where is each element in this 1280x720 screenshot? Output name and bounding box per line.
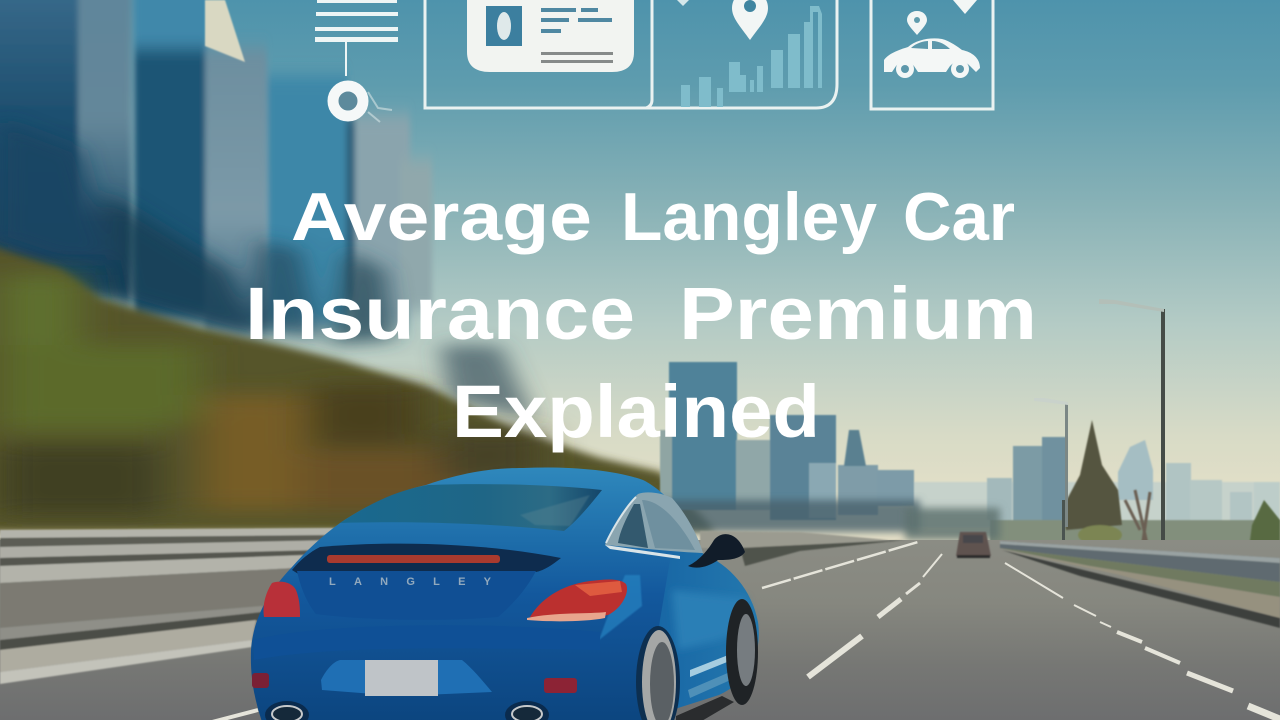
road surface	[0, 540, 1280, 720]
icon: list lines and pin	[315, 0, 398, 122]
title line 2: Premium	[679, 272, 1037, 355]
panel: driver card and chart frame	[425, 0, 837, 108]
door sill	[690, 650, 742, 677]
wing mirror	[688, 534, 745, 568]
title line 1: Car	[903, 179, 1015, 255]
title	[245, 179, 1037, 453]
rear window	[340, 484, 602, 531]
title line 1: Langley	[621, 179, 877, 255]
bar chart	[681, 6, 822, 107]
title line 1: Average	[291, 179, 592, 255]
car body	[251, 468, 688, 720]
title line 3: Explained	[452, 370, 820, 453]
distant city skyline	[660, 362, 1280, 557]
far wheel	[726, 599, 758, 705]
far road shoulder behind the rail	[700, 531, 890, 548]
blurred towers on the left	[0, 0, 535, 420]
icon: location pin	[907, 11, 927, 35]
small pin	[677, 0, 689, 6]
under-car shadow	[676, 696, 734, 720]
left tail light	[263, 582, 300, 617]
right guard rail	[1000, 541, 1280, 628]
left reflector	[252, 673, 269, 688]
roadside trees	[1064, 420, 1280, 557]
license plate recess	[321, 660, 492, 696]
brake light bar	[327, 555, 500, 563]
lane markings	[212, 542, 1280, 720]
right tail light	[530, 579, 627, 619]
right reflector	[544, 678, 577, 693]
title line 2: Insurance	[245, 272, 635, 355]
left guard rail	[0, 528, 905, 684]
license plate	[365, 660, 438, 696]
model badge: LANGLEY	[329, 576, 492, 588]
side windows	[605, 492, 703, 553]
street lamps	[1034, 299, 1165, 551]
panel: car and pin frame	[871, 0, 993, 109]
trunk lid	[297, 571, 536, 620]
bumper crease	[254, 625, 600, 660]
blurred green hillside	[0, 245, 715, 532]
icon: upper pin	[953, 0, 977, 14]
icon: car	[884, 38, 980, 78]
spoiler	[292, 544, 561, 575]
exhausts	[265, 701, 549, 720]
sky background	[0, 0, 1280, 560]
blue car	[251, 468, 759, 720]
fender highlight	[599, 575, 642, 640]
window reflection	[520, 495, 590, 526]
near wheel	[636, 626, 680, 720]
window trim	[605, 545, 680, 559]
map pin	[732, 0, 768, 40]
city base and low trees	[660, 500, 1000, 540]
conifer shadows over towers	[0, 120, 535, 420]
distant car	[956, 532, 991, 558]
right side panel	[580, 540, 759, 720]
side reflection	[672, 590, 752, 650]
id card	[467, 0, 634, 72]
